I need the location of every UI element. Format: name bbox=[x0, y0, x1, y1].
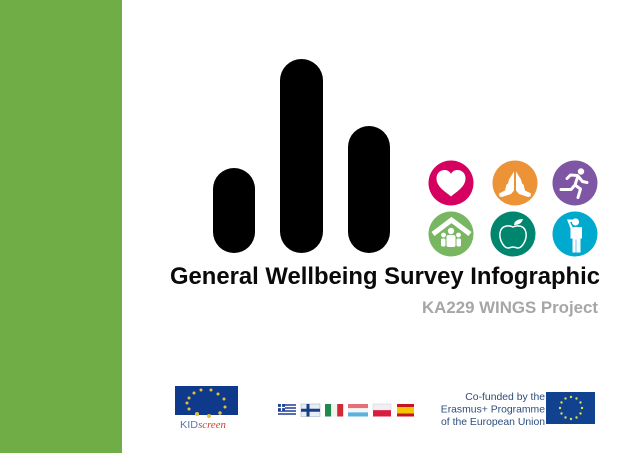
panel: green sidebar bbox=[0, 0, 122, 453]
flag: Spain bbox=[397, 404, 414, 416]
flag: Luxembourg bbox=[348, 404, 368, 416]
text: co-funded statement: Co-funded by the bbox=[465, 392, 545, 403]
flag: Greece bbox=[278, 404, 296, 416]
logo: Erasmus+ EU flag bbox=[546, 392, 595, 424]
icon: running person bbox=[552, 160, 598, 206]
flag: Finland bbox=[301, 404, 320, 416]
text: co-funded statement: of the European Union bbox=[441, 417, 545, 428]
icon: apple bbox=[490, 212, 536, 256]
text: co-funded statement bbox=[441, 392, 545, 428]
text: KIDscreen logo: KIDscreen bbox=[180, 419, 226, 431]
title: General Wellbeing Survey Infographic bbox=[170, 263, 600, 290]
flags: partner countries bbox=[278, 404, 414, 416]
icon: standing person bbox=[552, 212, 598, 256]
text: co-funded statement: Erasmus+ Programme bbox=[441, 404, 545, 416]
flag: Poland bbox=[373, 404, 391, 416]
subtitle: KA229 WINGS Project bbox=[422, 299, 599, 317]
icon: house with family bbox=[428, 212, 474, 256]
chart: three black rounded bars bbox=[213, 59, 390, 253]
flag: Italy bbox=[325, 404, 343, 416]
logo: EU flag with KIDscreen bbox=[175, 386, 238, 431]
icon: praying hands bbox=[492, 160, 538, 206]
icon: heart bbox=[428, 160, 474, 206]
